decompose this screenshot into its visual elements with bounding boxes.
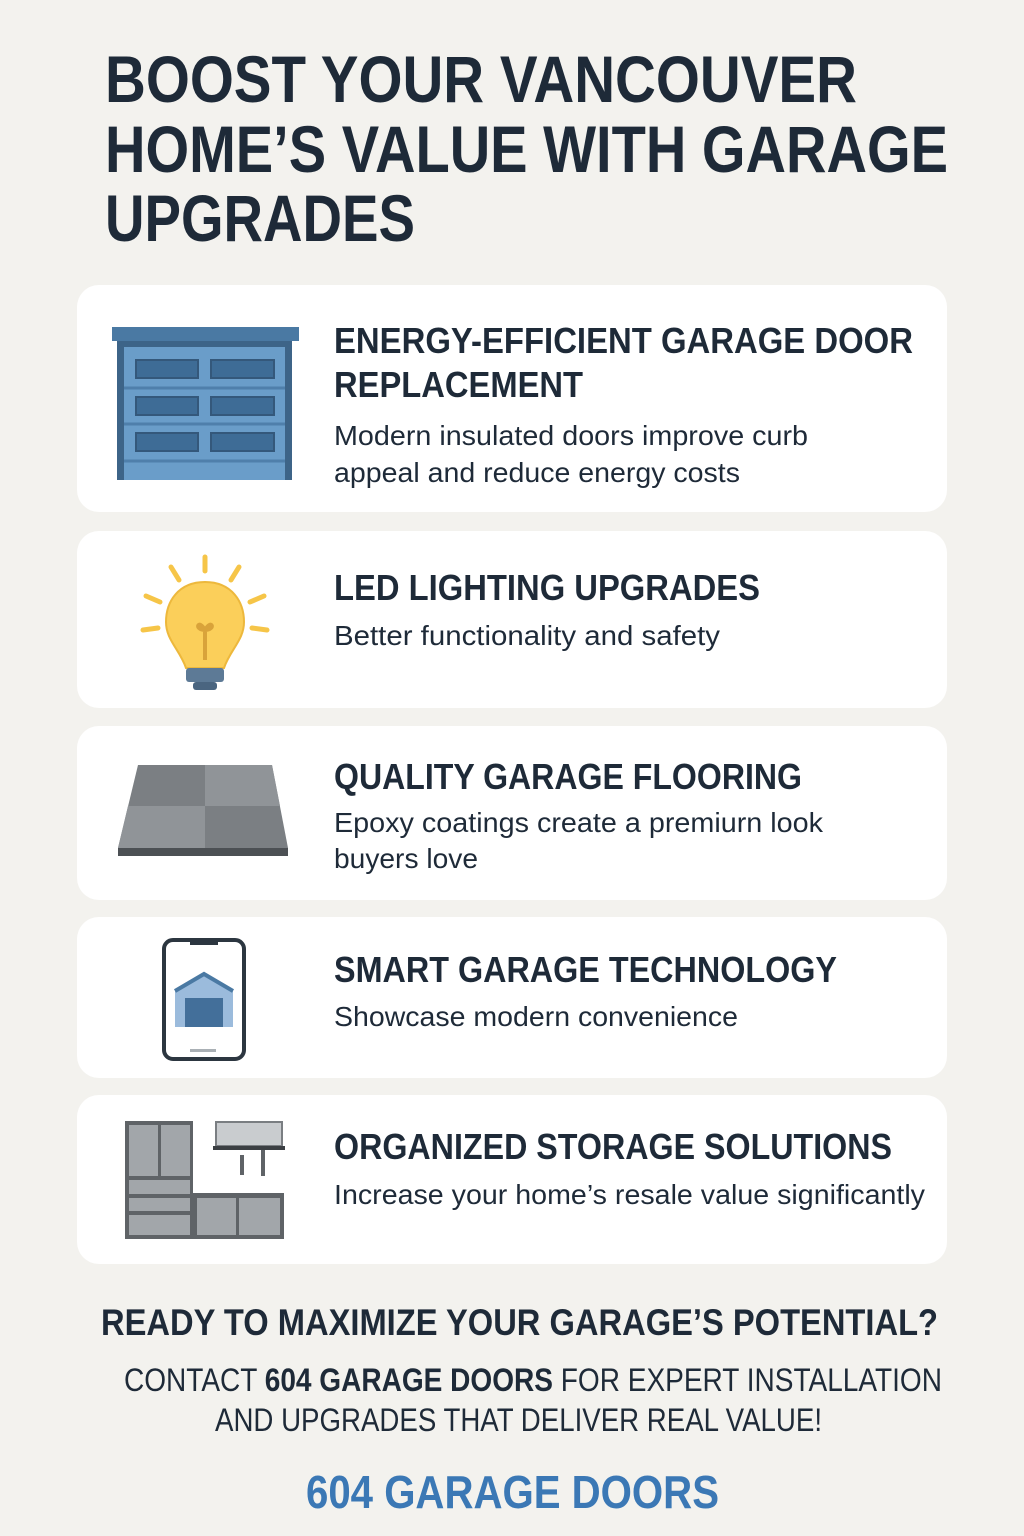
panel: flooring <box>77 726 947 900</box>
call to action heading: READY TO MAXIMIZE YOUR GARAGE’S POTENTIAL? <box>101 1302 938 1343</box>
heading: garage door: REPLACEMENT <box>334 364 583 405</box>
icon: light bulb <box>143 557 267 690</box>
panel: smart technology <box>77 917 947 1078</box>
panel: LED lighting <box>77 531 947 708</box>
title <box>105 42 948 255</box>
call to action text <box>124 1362 942 1438</box>
heading: smart: SMART GARAGE TECHNOLOGY <box>334 949 837 990</box>
heading: garage door <box>334 320 913 405</box>
heading: flooring: QUALITY GARAGE FLOORING <box>334 756 802 797</box>
text: smart description: Showcase modern convenience <box>334 1001 738 1032</box>
text: LED description: Better functionality and safety <box>334 620 720 651</box>
icon: garage door <box>112 327 299 480</box>
heading: garage door: ENERGY-EFFICIENT GARAGE DOOR <box>334 320 913 361</box>
text: garage door description: appeal and reduce energy costs <box>334 457 740 488</box>
text: garage door description: Modern insulated doors improve curb <box>334 420 808 451</box>
text: flooring description: Epoxy coatings create a premiurn look <box>334 807 824 838</box>
text: storage description: Increase your home’s resale value significantly <box>334 1179 925 1210</box>
call to action text: AND UPGRADES THAT DELIVER REAL VALUE! <box>215 1402 822 1438</box>
title: BOOST YOUR VANCOUVER <box>105 42 857 116</box>
icon: storage cabinets <box>125 1121 285 1239</box>
title: UPGRADES <box>105 181 415 255</box>
panel: storage <box>77 1095 947 1264</box>
heading: LED: LED LIGHTING UPGRADES <box>334 567 760 608</box>
icon: smartphone with garage <box>164 940 244 1059</box>
icon: floor tiles <box>118 765 288 856</box>
text: flooring description <box>334 807 824 874</box>
panel: garage door replacement <box>77 285 947 512</box>
heading: storage: ORGANIZED STORAGE SOLUTIONS <box>334 1126 892 1167</box>
brand name: 604 GARAGE DOORS <box>306 1466 719 1518</box>
text: garage door description <box>334 420 808 488</box>
text: flooring description: buyers love <box>334 843 478 874</box>
call to action text: CONTACT 604 GARAGE DOORS FOR EXPERT INSTALLATION <box>124 1362 942 1398</box>
